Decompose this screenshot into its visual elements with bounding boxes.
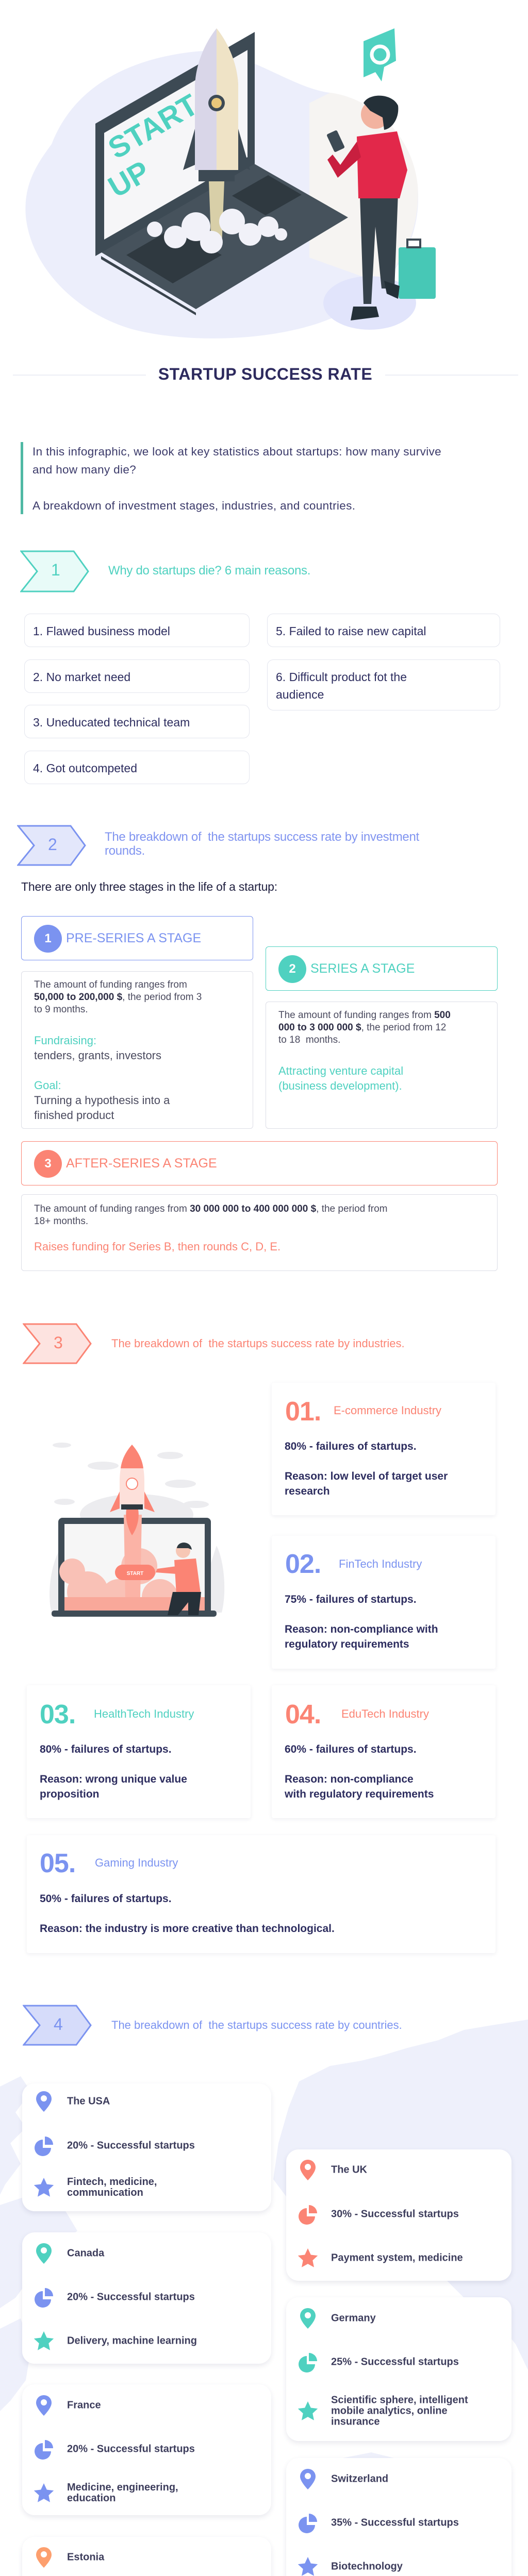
country card: USA <box>22 2083 271 2211</box>
country card: Germany: Germany <box>331 2312 376 2324</box>
country card: France: France <box>67 2400 101 2411</box>
industry card 01: E-commerce Industry <box>334 1404 441 1417</box>
reason 3: 3. Uneducated technical team <box>33 716 190 729</box>
country card: Switzerland: Biotechnology <box>331 2561 403 2572</box>
background blob <box>25 51 418 338</box>
country card: USA: 20% - Successful startups <box>67 2140 195 2151</box>
industry card 02: regulatory requirements <box>285 1638 409 1650</box>
illustration: rocket launch laptop <box>50 1443 224 1617</box>
reason 6 <box>267 659 500 710</box>
industry card 03: 80% - failures of startups. <box>40 1743 172 1755</box>
industry card 02: 75% - failures of startups. <box>285 1594 417 1605</box>
laptop <box>95 32 348 315</box>
stage 2 content: (business development). <box>278 1079 402 1092</box>
industry card 03: HealthTech Industry <box>94 1707 194 1720</box>
country card: Canada: 20% - Successful startups <box>67 2292 195 2303</box>
country card: Germany: Scientific sphere, intelligent <box>331 2395 468 2406</box>
woman <box>176 1544 190 1558</box>
reason 1: 1. Flawed business model <box>33 624 170 638</box>
industry card 03: 03. <box>40 1700 75 1730</box>
stage 2 content <box>266 1002 498 1129</box>
country card: Estonia: Estonia <box>67 2551 104 2563</box>
reason 4 <box>24 751 250 784</box>
intro text block: In this infographic, we look at key statistics about startups: how many survive <box>32 445 441 458</box>
country card: Estonia <box>22 2537 271 2576</box>
section 3 heading: The breakdown of the startups success rate by industries. <box>111 1337 405 1350</box>
stage 3 content: 18+ months. <box>34 1216 88 1227</box>
intro text block: and how many die? <box>32 463 136 476</box>
industry card 03 <box>27 1685 251 1818</box>
country card: UK: 30% - Successful startups <box>331 2208 459 2219</box>
stage 3 header: AFTER-SERIES A STAGE <box>66 1156 217 1171</box>
gear bubble <box>364 28 396 81</box>
hero illustration <box>26 28 436 338</box>
intro text block <box>21 442 441 514</box>
section 2 heading <box>17 825 419 866</box>
section 2 heading: 2 <box>48 835 57 854</box>
stage 3 header: 3 <box>44 1157 52 1171</box>
section 1 heading: 1 <box>51 561 60 579</box>
country card: Switzerland <box>286 2458 512 2576</box>
stage 2 header <box>266 946 498 991</box>
country card: Germany: mobile analytics, online <box>331 2405 448 2416</box>
rocket <box>183 28 250 247</box>
country card: Switzerland: 35% - Successful startups <box>331 2517 459 2529</box>
country card: France: education <box>67 2493 116 2504</box>
industry card 02 <box>272 1536 496 1669</box>
reason 4: 4. Got outcompeted <box>33 761 137 775</box>
stage 1 header: PRE-SERIES A STAGE <box>66 931 201 945</box>
stage 1 header: 1 <box>44 931 52 945</box>
stage 1 content <box>21 971 253 1129</box>
stage 3 content: Raises funding for Series B, then rounds C, D, E. <box>34 1240 280 1253</box>
industry card 04: 04. <box>285 1700 321 1730</box>
stage 2 header: SERIES A STAGE <box>310 961 415 976</box>
START button <box>115 1565 155 1580</box>
reason 1 <box>24 614 250 647</box>
industry card 02: Reason: non-compliance with <box>285 1623 438 1635</box>
stage 3 content <box>21 1194 498 1271</box>
industry card 05: 05. <box>40 1849 75 1878</box>
laptop: UP <box>103 155 155 204</box>
section 4 heading: The breakdown of the startups success rate by countries. <box>111 2019 402 2031</box>
industry card 04: Reason: non-compliance <box>285 1773 414 1785</box>
stage 2 header: 2 <box>289 962 296 976</box>
stage 2 content: to 18 months. <box>278 1035 340 1045</box>
stage 1 content: 50,000 to 200,000 $, the period from 3 <box>34 992 202 1003</box>
industry card 05: Gaming Industry <box>95 1856 178 1869</box>
stage 3 header <box>21 1141 498 1185</box>
reason 5: 5. Failed to raise new capital <box>276 624 426 638</box>
country card: Germany: 25% - Successful startups <box>331 2357 459 2368</box>
industry card 01 <box>272 1383 496 1515</box>
country card: France: 20% - Successful startups <box>67 2443 195 2454</box>
smoke clouds <box>147 209 287 253</box>
START UP text: START <box>103 88 204 165</box>
country card: Canada: Delivery, machine learning <box>67 2335 197 2346</box>
reason 2 <box>24 659 250 693</box>
industry card 03: proposition <box>40 1788 99 1800</box>
world map background <box>0 2020 528 2458</box>
country card: USA: The USA <box>67 2096 110 2107</box>
industry card 04: with regulatory requirements <box>285 1788 434 1800</box>
industry card 02: 02. <box>285 1549 321 1579</box>
stage 1 content: Turning a hypothesis into a <box>34 1094 170 1107</box>
section 4 heading <box>23 2005 402 2045</box>
stage 2 content: 000 to 3 000 000 $, the period from 12 <box>278 1022 446 1033</box>
industry card 01: Reason: low level of target user <box>285 1470 448 1482</box>
reason 3 <box>24 705 250 738</box>
industry card 05: Reason: the industry is more creative than technological. <box>40 1923 335 1935</box>
stage 1 content: tenders, grants, investors <box>34 1049 161 1062</box>
section 4 heading: 4 <box>54 2015 63 2033</box>
stage 2 content: The amount of funding ranges from 500 <box>278 1010 451 1021</box>
industry card 01: 80% - failures of startups. <box>285 1440 417 1452</box>
stage 1 content: Goal: <box>34 1079 61 1092</box>
reason 6: audience <box>276 688 324 701</box>
industry card 03: Reason: wrong unique value <box>40 1773 187 1785</box>
section 1 heading: Why do startups die? 6 main reasons. <box>108 564 310 578</box>
industry card 05: 50% - failures of startups. <box>40 1893 172 1905</box>
country card: UK: Payment system, medicine <box>331 2252 463 2264</box>
country card: France <box>22 2384 271 2515</box>
industry card 01: 01. <box>285 1397 321 1427</box>
country card: Switzerland: Switzerland <box>331 2473 388 2484</box>
section 3 heading <box>23 1323 405 1364</box>
country card: UK <box>286 2149 512 2281</box>
stage 1 content: to 9 months. <box>34 1004 88 1015</box>
country card: Germany: insurance <box>331 2416 380 2428</box>
reason 5 <box>267 614 500 647</box>
country card: UK: The UK <box>331 2164 367 2175</box>
country card: Canada: Canada <box>67 2247 104 2259</box>
industry card 04: 60% - failures of startups. <box>285 1743 417 1755</box>
country card: Germany <box>286 2297 512 2441</box>
stage 1 content: finished product <box>34 1109 114 1122</box>
intro text block: A breakdown of investment stages, industries, and countries. <box>32 499 355 512</box>
title: STARTUP SUCCESS RATE <box>158 365 372 383</box>
industry card 01: research <box>285 1485 330 1497</box>
country card: France: Medicine, engineering, <box>67 2482 178 2493</box>
section 2 heading: rounds. <box>105 844 145 858</box>
stage 3 content: The amount of funding ranges from 30 000 000 to 400 000 000 $, the period from <box>34 1204 388 1214</box>
stages intro: There are only three stages in the life of a startup: <box>21 880 277 893</box>
country card: USA: communication <box>67 2187 143 2198</box>
country card: Canada <box>22 2232 271 2364</box>
section 1 heading <box>20 550 310 592</box>
stage 1 header <box>21 916 253 960</box>
country card: USA: Fintech, medicine, <box>67 2176 157 2188</box>
industry card 04: EduTech Industry <box>341 1707 429 1720</box>
illustration: rocket launch laptop: START <box>127 1571 143 1577</box>
section 3 heading: 3 <box>54 1333 63 1352</box>
industry card 02: FinTech Industry <box>339 1557 422 1570</box>
reasons list <box>24 614 500 784</box>
reason 2: 2. No market need <box>33 670 130 684</box>
industry card 04 <box>272 1685 496 1818</box>
industry card 05 <box>27 1835 496 1953</box>
section 2 heading: The breakdown of the startups success rate by investment <box>105 830 419 844</box>
stage 1 content: The amount of funding ranges from <box>34 979 187 990</box>
reason 6: 6. Difficult product fot the <box>276 670 407 684</box>
person <box>323 96 436 330</box>
stage 2 content: Attracting venture capital <box>278 1064 403 1077</box>
stage 1 content: Fundraising: <box>34 1034 96 1047</box>
